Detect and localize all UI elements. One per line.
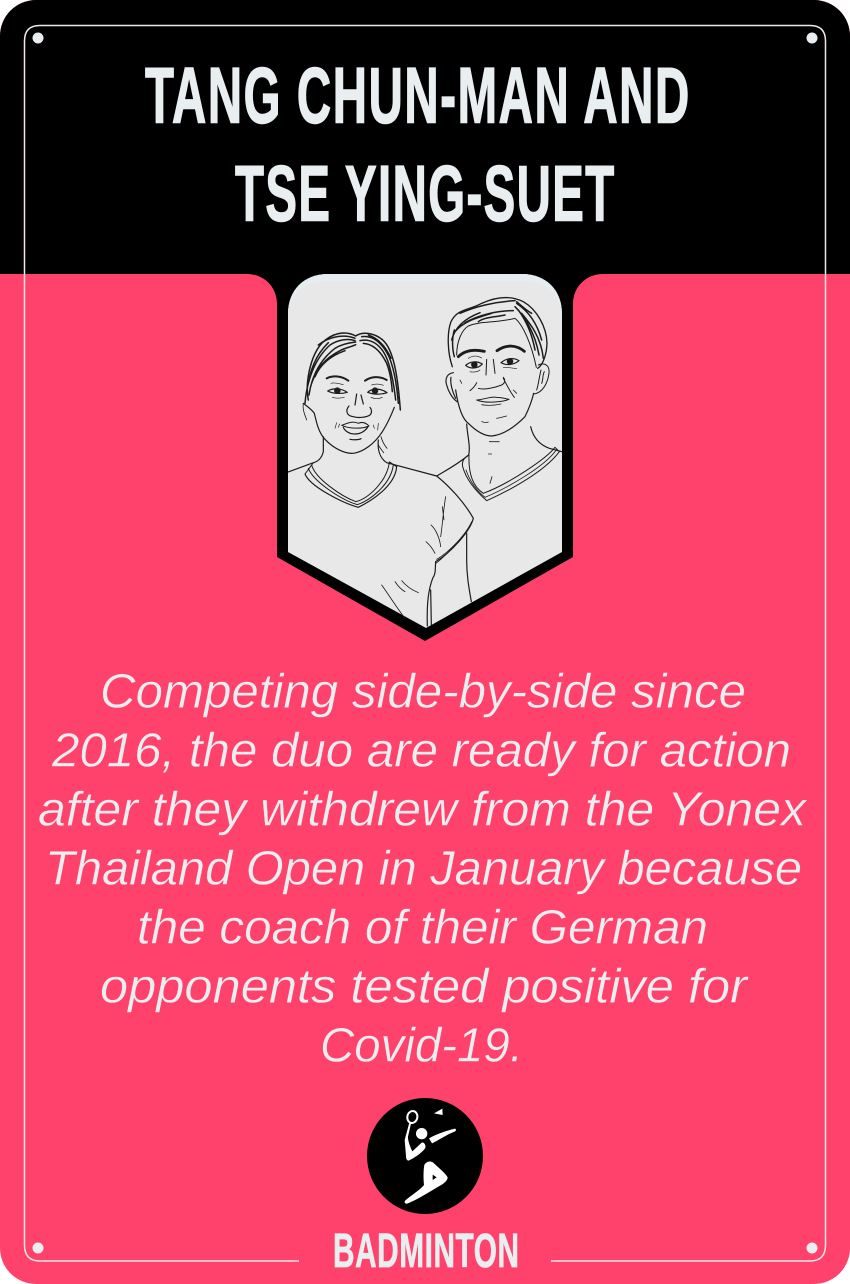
- body text: Thailand Open in January because: [45, 842, 802, 896]
- body text: 2016, the duo are ready for action: [51, 724, 791, 778]
- body text: after they withdrew from the Yonex: [38, 784, 808, 836]
- body text: the coach of their German: [137, 902, 708, 954]
- title: TANG CHUN-MAN AND: [145, 51, 689, 139]
- portrait illustration: two athletes: [288, 298, 562, 626]
- body text: Covid-19.: [320, 1020, 523, 1072]
- man's head: [446, 298, 549, 436]
- title: TSE YING-SUET: [235, 149, 614, 237]
- icon: badminton pictogram: [367, 1098, 483, 1214]
- label: badminton: BADMINTON: [333, 1225, 519, 1278]
- woman's sleeve and arm: [382, 476, 473, 626]
- woman's neck and collar: [288, 437, 437, 507]
- portrait shield: [277, 274, 573, 641]
- body text: opponents tested positive for: [100, 960, 749, 1014]
- body text: Competing side-by-side since: [100, 666, 746, 718]
- body text: [38, 666, 808, 1072]
- title: [145, 51, 689, 237]
- woman's head: [303, 333, 400, 453]
- man's neck and collar: [437, 424, 562, 501]
